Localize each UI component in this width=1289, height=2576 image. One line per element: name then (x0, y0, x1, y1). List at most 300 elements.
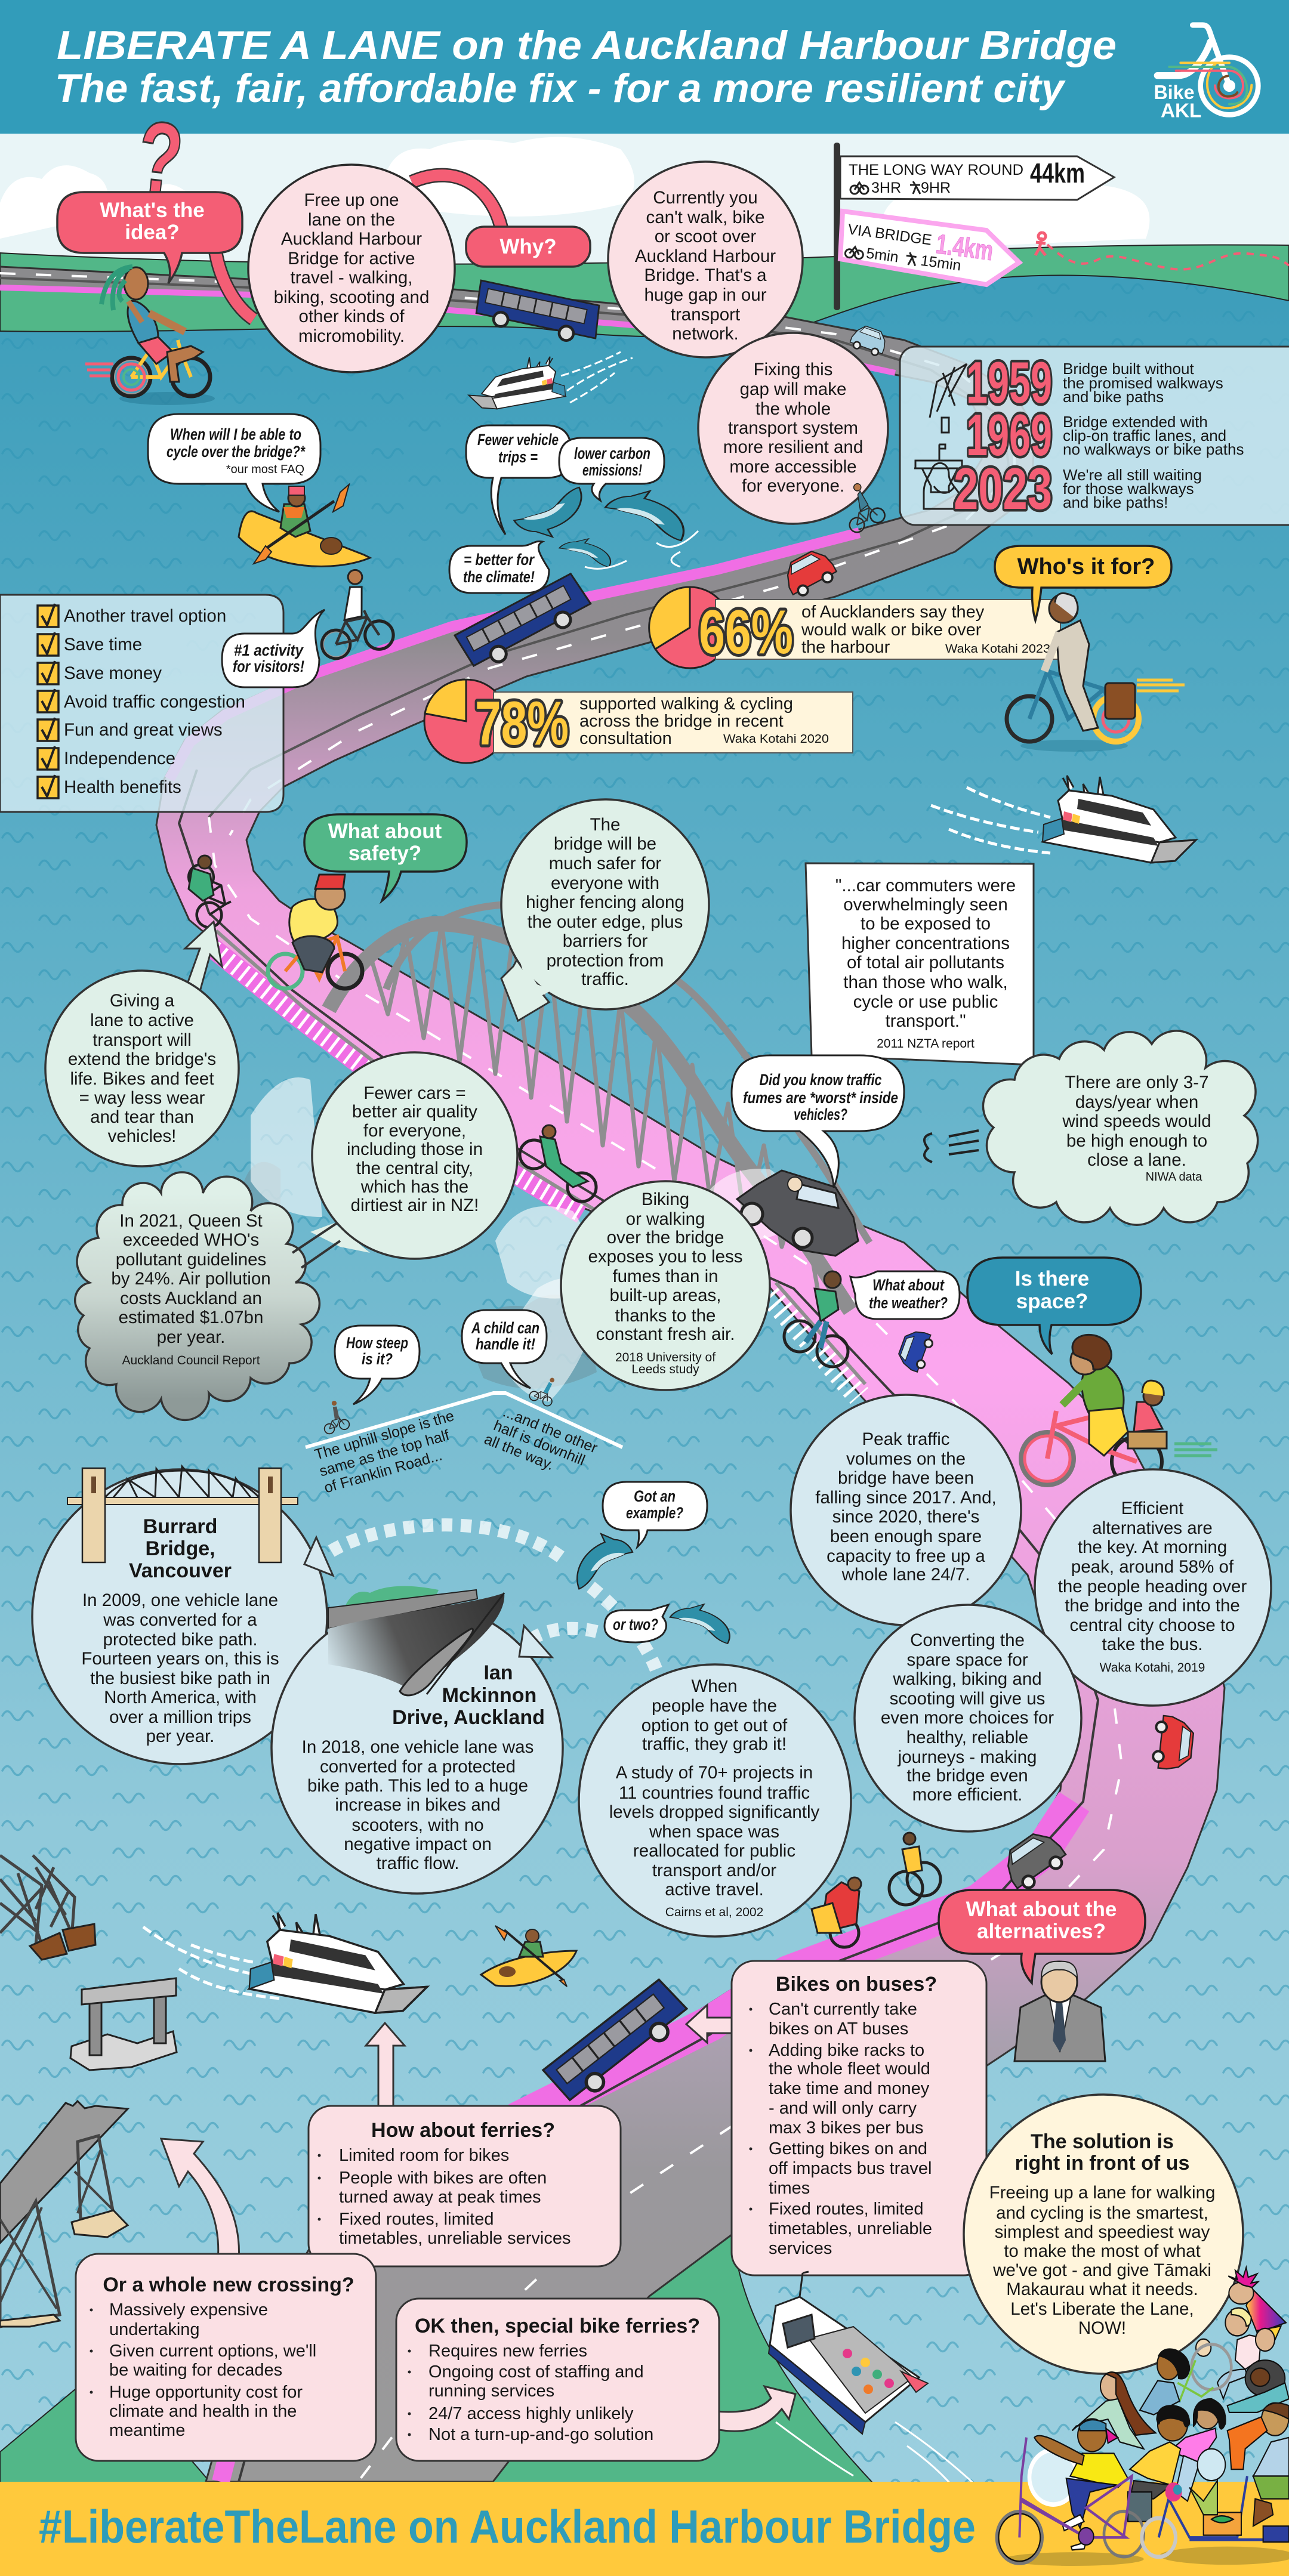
sign: via bridge: 5min (865, 245, 899, 266)
bubble: fewer cars: which has the (360, 1177, 468, 1197)
panel: history: no walkways or bike paths (1063, 440, 1244, 458)
bubble: did you know traffic fumes: Did you know traffic (759, 1071, 882, 1089)
bubble: got an example: Got an (634, 1487, 676, 1505)
bubble: when people have the option: active travel. (665, 1880, 764, 1899)
bubble: when will I be able to cycle: *our most FAQ (226, 463, 304, 476)
bubble: fixing this gap: more accessible (729, 457, 857, 477)
panel: checklist of benefits (0, 595, 283, 812)
stat: 78 percent: Waka Kotahi 2020 (723, 733, 829, 746)
bubble: when people have the option: when space was (649, 1822, 779, 1842)
panel: special bike ferries: 24/7 access highly unlikely (428, 2404, 634, 2423)
bubble: Burrard Bridge: Bridge, (145, 1537, 215, 1560)
bubble: is there space (967, 1258, 1141, 1354)
cloud: Queen St pollution: estimated $1.07bn (119, 1308, 263, 1327)
ferry: top (469, 352, 633, 409)
lane lines (0, 273, 1122, 2482)
bubble: free up one lane: other kinds of (298, 307, 405, 326)
bubble: the solution: The solution is (1031, 2130, 1174, 2153)
bubble: efficient alternatives: central city choose to (1069, 1616, 1235, 1635)
bubble: when people have the option: A study of 70+ projects in (616, 1763, 813, 1783)
bubble: biking or walking: over the bridge (607, 1228, 724, 1247)
bubble: giving a lane: = way less wear (79, 1088, 205, 1108)
wind lines (924, 1131, 979, 1162)
arrow: ferries (366, 2023, 405, 2112)
header (0, 0, 1289, 134)
bubble: when will I be able to cycle (148, 414, 320, 512)
cyclist: man in red hat (268, 875, 362, 989)
bubble: efficient alternatives: take the bus. (1102, 1635, 1202, 1654)
panel: history: and bike paths (1063, 388, 1164, 406)
bubble: Burrard Bridge: over a million trips (109, 1707, 251, 1727)
cloud: only 3-7 days: close a lane. (1087, 1150, 1186, 1170)
bubble: did you know traffic fumes: vehicles? (794, 1105, 847, 1123)
bubble: Ian Mckinnon Drive: scooters, with no (351, 1815, 484, 1835)
bottom banner: #LiberateTheLane on Auckland Harbour Bridge (39, 2500, 976, 2553)
panel: checklist of benefits: Save time (64, 635, 142, 654)
cloud: Queen St pollution (75, 1172, 319, 1420)
bubble: currently you can't: Auckland Harbour (635, 246, 776, 266)
bubble: is there space: space? (1016, 1290, 1088, 1313)
panel: checklist of benefits: Another travel option (64, 606, 226, 626)
cloud: only 3-7 days: days/year when (1075, 1092, 1198, 1112)
walking trail (1035, 233, 1289, 270)
bubble: giving a lane: transport will (92, 1030, 192, 1050)
bubble: what about safety: safety? (349, 842, 421, 865)
bubble: Burrard Bridge: North America, with (104, 1688, 257, 1707)
panel: whole new crossing: meantime (109, 2421, 185, 2440)
question mark: ? (132, 100, 188, 218)
hill slope diagram: ...and the other (501, 1404, 600, 1457)
bubble: what's the idea: What's the (100, 199, 205, 222)
bubble: the bridge will be much safer: everyone with (551, 873, 659, 893)
bubble: converting the spare space: healthy, reliable (906, 1728, 1028, 1747)
bubble: Ian Mckinnon Drive: In 2018, one vehicle lane was (302, 1737, 534, 1757)
title: LIBERATE A LANE on the Auckland Harbour Bridge (57, 23, 1117, 68)
magenta cycle strip (0, 288, 1074, 2482)
bubble: biking or walking (561, 1181, 770, 1390)
bubble: Burrard Bridge: the busiest bike path in (90, 1669, 270, 1688)
bubble: efficient alternatives: alternatives are (1092, 1518, 1213, 1538)
car: red top (779, 545, 839, 600)
bus: middle (455, 572, 595, 675)
bubble: fixing this gap: more resilient and (723, 437, 863, 457)
bubble: when people have the option: Cairns et al, 2002 (665, 1905, 763, 1919)
bubble: biking or walking: exposes you to less (588, 1247, 743, 1267)
black car with fumes (737, 1170, 858, 1256)
quote box: higher concentrations (841, 934, 1010, 953)
panel: history: Bridge built without (1063, 360, 1194, 378)
bubble: who's it for (995, 546, 1171, 620)
bubble: how steep: is it? (362, 1350, 393, 1368)
panel: whole new crossing: undertaking (109, 2320, 200, 2339)
bubble: what about the weather: What about (872, 1276, 945, 1294)
cyclist: near fixing bubble (834, 478, 887, 535)
bubble: Burrard Bridge (32, 1466, 333, 1764)
bubble: converting the spare space: more efficient. (912, 1785, 1022, 1805)
panel: history: for those walkways (1063, 480, 1194, 498)
bubble: lower carbon emissions: lower carbon (574, 444, 650, 462)
arrow to Ian Mckinnon (519, 1626, 552, 1657)
bubble: peak traffic: since 2020, there's (832, 1507, 979, 1527)
panel: special bike ferries: Requires new ferries (428, 2342, 587, 2361)
bubble: fewer cars: better air quality (352, 1102, 477, 1122)
bridge fence (206, 931, 865, 1396)
bubble: Ian Mckinnon Drive: bike path. This led to a huge (307, 1776, 528, 1796)
sign: long way round: THE LONG WAY ROUND (849, 162, 1023, 178)
bubble: the bridge will be much safer: higher fencing along (526, 892, 684, 912)
wheelchair user on bridge (520, 1125, 596, 1201)
quote box: transport." (885, 1011, 966, 1031)
sign: long way round: 9HR (921, 180, 951, 196)
icon: Burrard bridge (67, 1466, 298, 1562)
bubble: a child can handle it: A child can (471, 1319, 539, 1337)
head of green jacket cyclist (198, 855, 211, 869)
bubble: what's the idea: idea? (125, 221, 180, 244)
bus: lower (543, 1977, 693, 2109)
bubble: efficient alternatives: the key. At morning (1078, 1537, 1227, 1557)
bubble: the solution: to make the most of what (1004, 2241, 1201, 2261)
bubble: #1 activity: #1 activity (234, 641, 304, 659)
cyclist: older man with pannier (1007, 593, 1185, 752)
panel: history: and bike paths! (1063, 493, 1168, 511)
bubble: peak traffic: falling since 2017. And, (815, 1488, 997, 1508)
bubble: when people have the option: When (691, 1676, 738, 1696)
stat: 66 percent: of Aucklanders say they (801, 603, 985, 622)
land: top shore (0, 245, 1289, 336)
bubble: fixing this gap: Fixing this (754, 360, 832, 379)
bubble: free up one lane: biking, scooting and (274, 288, 429, 307)
panel: history: 2023 (954, 456, 1052, 521)
panel: whole new crossing: Or a whole new crossing? (103, 2274, 354, 2296)
panel: special bike ferries: OK then, special bike ferries? (415, 2315, 700, 2337)
stat: 66 percent: the harbour (801, 638, 890, 657)
bubble: how steep (335, 1326, 420, 1404)
panel: how about ferries: Fixed routes, limited (339, 2210, 494, 2229)
cloud: Queen St pollution: exceeded WHO's (123, 1230, 259, 1250)
bubble: currently you can't: network. (672, 324, 739, 344)
cloud: only 3-7 days: There are only 3-7 (1065, 1073, 1209, 1092)
bubble: biking or walking: built-up areas, (610, 1286, 721, 1305)
bubble: peak traffic: been enough spare (830, 1527, 982, 1546)
quote box: of total air pollutants (847, 953, 1004, 972)
bridge pier lower left (0, 2101, 128, 2327)
stat: 78 percent: 78% (475, 689, 569, 758)
bubble: biking or walking: fumes than in (612, 1267, 718, 1286)
bubble: giving a lane: and tear than (90, 1107, 194, 1127)
bubble: when people have the option: reallocated for public (633, 1841, 795, 1861)
bubble: peak traffic (791, 1395, 1021, 1625)
cloud: Queen St pollution: In 2021, Queen St (119, 1211, 263, 1231)
bubble: peak traffic: whole lane 24/7. (841, 1565, 970, 1584)
route dashes and arrows (331, 1525, 659, 1679)
panel: whole new crossing (76, 2254, 376, 2461)
panel: history: We're all still waiting (1063, 466, 1202, 484)
bubble: who's it for: Who's it for? (1017, 554, 1155, 579)
cloud: Queen St pollution: costs Auckland an (120, 1289, 262, 1308)
panel: bikes on buses: max 3 bikes per bus (769, 2118, 924, 2138)
panel: whole new crossing: Massively expensive (109, 2300, 268, 2319)
bubble: #1 activity (222, 610, 325, 687)
sign: via bridge (840, 211, 1019, 285)
bubble: the solution: simplest and speediest way (995, 2222, 1210, 2242)
cloud: only 3-7 days (983, 1031, 1258, 1225)
panel: whole new crossing: Huge opportunity cost for (109, 2383, 303, 2402)
logo: Bike AKL: AKL (1161, 100, 1201, 122)
van: red (1152, 1715, 1195, 1771)
stat: 78 percent: across the bridge in recent (579, 712, 784, 731)
bubble: giving a lane: Giving a (110, 991, 175, 1011)
cloud: Queen St pollution: Auckland Council Report (122, 1354, 260, 1367)
panel: bikes on buses: timetables, unreliable (769, 2219, 932, 2238)
hill slope diagram: The uphill slope is the (313, 1407, 456, 1463)
car: blue on bridge (895, 1327, 935, 1374)
bubble: giving a lane (45, 922, 239, 1166)
bubble: fewer cars: for everyone, (363, 1121, 466, 1141)
bubble: Ian Mckinnon Drive (272, 1586, 563, 1894)
panel: special bike ferries: Not a turn-up-and-go solution (428, 2425, 653, 2444)
panel: history: the promised walkways (1063, 374, 1223, 392)
bubble: efficient alternatives: Waka Kotahi, 2019 (1100, 1661, 1205, 1675)
bubble: what about safety: What about (328, 820, 442, 843)
bubble: Burrard Bridge: In 2009, one vehicle lane (82, 1590, 278, 1610)
bubble: converting the spare space: Converting the (910, 1630, 1025, 1650)
bubble: or two: or two? (613, 1616, 658, 1633)
bubble: when people have the option: option to get out of (642, 1716, 788, 1735)
bubble: the bridge will be much safer: much safer for (549, 854, 661, 873)
panel: whole new crossing: be waiting for decades (109, 2361, 282, 2380)
panel: bikes on buses: bikes on AT buses (769, 2019, 908, 2038)
stat: 66 percent: 66% (699, 598, 793, 667)
cloud: Queen St pollution: by 24%. Air pollution (111, 1269, 271, 1289)
sign: long way round: 3HR (871, 180, 901, 196)
quote box: "...car commuters were (835, 876, 1016, 895)
bubble: the solution: Let's Liberate the Lane, (1010, 2299, 1194, 2319)
stat: 66 percent: would walk or bike over (801, 620, 982, 640)
ferry: lower (143, 1913, 427, 2013)
bike ferry (769, 2272, 991, 2506)
sign: via bridge: VIA BRIDGE (847, 221, 933, 249)
stat: 66 percent: Waka Kotahi 2023 (945, 643, 1050, 656)
bubble: Burrard Bridge: Fourteen years on, this is (81, 1649, 279, 1669)
panel: special bike ferries: Ongoing cost of staffing and (428, 2362, 644, 2382)
bubble: a child can handle it (462, 1310, 547, 1388)
bubble: Ian Mckinnon Drive: Mckinnon (442, 1684, 536, 1707)
bubble: peak traffic: bridge have been (838, 1468, 974, 1488)
hill slope diagram: of Franklin Road... (322, 1447, 444, 1497)
trike with passengers (812, 1877, 861, 1947)
panel: history: Bridge extended with (1063, 413, 1208, 431)
panel: history (900, 347, 1289, 525)
bubble: the solution (964, 2095, 1243, 2374)
stat: 66 percent (649, 587, 1060, 668)
bubble: free up one lane: lane on the (308, 210, 395, 230)
panel: bikes on buses: Getting bikes on and (769, 2139, 927, 2158)
bubble: #1 activity: for visitors! (233, 657, 304, 675)
bubble: did you know traffic fumes: fumes are *worst* inside (743, 1089, 898, 1107)
bubble: did you know traffic fumes (732, 1055, 904, 1188)
bubble: a child can handle it: handle it! (476, 1335, 535, 1353)
panel: checklist of benefits: Independence (64, 749, 175, 768)
bubble: better for the climate: = better for (464, 551, 535, 569)
bubble: currently you can't: Currently you (653, 188, 758, 208)
bottom banner (0, 2482, 1289, 2576)
logo: Bike AKL (1154, 25, 1258, 122)
bubble: lower carbon emissions: emissions! (582, 461, 642, 479)
cyclist: girl (85, 267, 215, 405)
sign: long way round (840, 156, 1114, 200)
bubble: peak traffic: Peak traffic (862, 1429, 950, 1449)
panel: history: 1969 (966, 402, 1052, 468)
tails: red connectors (215, 175, 502, 319)
bubble: when people have the option: 11 countries found traffic (619, 1783, 810, 1803)
panel: special bike ferries: running services (428, 2382, 554, 2401)
bubble: the solution: we've got - and give Tāmaki (992, 2260, 1211, 2280)
cloud: Queen St pollution: pollutant guidelines (116, 1250, 266, 1270)
bubble: peak traffic: volumes on the (846, 1449, 966, 1469)
panel: bikes on buses (732, 1961, 986, 2275)
bubble: efficient alternatives: Efficient (1121, 1499, 1183, 1518)
bubble: converting the spare space: journeys - making (898, 1747, 1037, 1767)
sign: long way round: 44km (1030, 157, 1085, 189)
bubble: what about the alternatives: What about the (966, 1898, 1117, 1921)
arrow: buses (686, 2005, 737, 2043)
bubble: when will I be able to cycle: When will I be able to (170, 425, 301, 443)
bubble: what about the alternatives: alternatives? (977, 1920, 1106, 1943)
bubble: fixing this gap: the whole (755, 399, 831, 419)
bubble: biking or walking: 2018 University of (615, 1351, 716, 1364)
bubble: giving a lane: vehicles! (108, 1126, 176, 1146)
bubble: how steep: How steep (346, 1334, 408, 1352)
bubble: when people have the option: levels dropped significantly (609, 1802, 820, 1822)
bubble: the bridge will be much safer: the outer edge, plus (528, 912, 683, 932)
hill slope diagram: all the way. (482, 1431, 556, 1474)
cloud: only 3-7 days: NIWA data (1146, 1170, 1202, 1184)
bubble: fixing this gap: gap will make (740, 379, 846, 399)
bubble: or two (605, 1605, 668, 1642)
bubble: fewer vehicle trips (466, 425, 571, 535)
bubble: the solution: right in front of us (1015, 2152, 1189, 2175)
cloud: only 3-7 days: wind speeds would (1062, 1111, 1211, 1131)
bubble: Ian Mckinnon Drive: negative impact on (344, 1834, 492, 1854)
signpost (834, 143, 1114, 310)
bubble: what's the idea (57, 192, 242, 283)
bubble: Ian Mckinnon Drive: increase in bikes and (335, 1795, 501, 1815)
mini cyclists (317, 1398, 350, 1435)
man in suit (1014, 1962, 1105, 2061)
bubble: why (466, 227, 590, 267)
bubble: Burrard Bridge: Burrard (143, 1515, 217, 1538)
quote box: to be exposed to (861, 914, 991, 934)
panel: special bike ferries (396, 2299, 719, 2461)
panel: bikes on buses: Bikes on buses? (776, 1973, 937, 1996)
bubble: the solution: Makaurau what it needs. (1006, 2280, 1198, 2299)
cloud: only 3-7 days: be high enough to (1066, 1131, 1207, 1151)
land: lower shores (0, 2231, 877, 2488)
arrow: new crossing (161, 2139, 239, 2261)
bubble: converting the spare space (855, 1605, 1081, 1831)
bridge arch and hangers (329, 905, 869, 1311)
bubble: when people have the option: people have the (652, 1696, 777, 1716)
logo: Bike AKL: Bike (1154, 82, 1195, 104)
bubble: when will I be able to cycle: cycle over the bridge?* (166, 443, 306, 461)
bubble: efficient alternatives: the bridge and into the (1065, 1596, 1240, 1616)
bubble: got an example: example? (626, 1504, 683, 1522)
panel: bikes on buses: Fixed routes, limited (769, 2200, 924, 2219)
subtitle: The fast, fair, affordable fix - for a more resilient city (55, 66, 1066, 111)
crowd of cyclists (997, 2268, 1289, 2566)
bubble: currently you can't: can't walk, bike (646, 208, 765, 227)
concrete ties (70, 1978, 177, 2070)
panel: how about ferries: People with bikes are often (339, 2169, 547, 2188)
pollution lines (292, 1223, 340, 1268)
car: top blue (849, 323, 889, 357)
bubble: better for the climate: the climate! (463, 568, 535, 586)
bubble: lower carbon emissions (559, 438, 664, 501)
bubble: is there space: Is there (1015, 1267, 1089, 1290)
bubble: converting the spare space: the bridge even (906, 1766, 1028, 1786)
bubble: fewer vehicle trips: trips = (498, 448, 538, 466)
bubble: the solution: and cycling is the smartest, (996, 2203, 1208, 2223)
quote box: cycle or use public (853, 992, 998, 1012)
cyclist: lower (889, 1833, 940, 1905)
bubble: the bridge will be much safer: bridge will be (554, 834, 656, 854)
bubble: efficient alternatives (1035, 1469, 1271, 1706)
bubble: free up one lane (248, 165, 455, 372)
bubble: free up one lane: Auckland Harbour (281, 229, 422, 249)
bubble: giving a lane: life. Bikes and feet (70, 1069, 214, 1089)
bubble: peak traffic: capacity to free up a (827, 1546, 985, 1566)
panel: whole new crossing: Given current options, we'll (109, 2342, 316, 2361)
bubble: Burrard Bridge: Vancouver (129, 1559, 232, 1582)
quote box: 2011 NZTA report (877, 1037, 975, 1051)
arrow: special ferries (716, 2386, 795, 2431)
panel: how about ferries: timetables, unreliable services (339, 2229, 571, 2248)
bus: top road (473, 280, 602, 347)
bubble: Ian Mckinnon Drive: traffic flow. (377, 1854, 459, 1873)
checklist items (38, 606, 58, 798)
bubble: the bridge will be much safer: protection from (547, 951, 664, 971)
hill slope diagram: same as the top half (317, 1427, 451, 1480)
bubble: why: Why? (499, 235, 557, 258)
cyclist: woman and child (1021, 1335, 1217, 1487)
quote box: overwhelmingly seen (843, 895, 1008, 915)
bubble: fixing this gap: transport system (728, 418, 858, 438)
panel: checklist of benefits: Fun and great views (64, 720, 223, 740)
arrow to Burrard (304, 1537, 333, 1576)
bubble: free up one lane: Bridge for active (288, 249, 415, 268)
bubble: currently you can't: transport (671, 305, 740, 325)
panel: bikes on buses: services (769, 2239, 832, 2258)
car: grey (997, 1826, 1070, 1894)
bubble: when people have the option: traffic, they grab it! (642, 1734, 787, 1754)
panel: history: 1959 (966, 350, 1052, 415)
bubble: free up one lane: micromobility. (298, 326, 405, 346)
bubble: currently you can't (608, 162, 803, 357)
quote box: than those who walk, (843, 972, 1008, 992)
panel: history: clip-on traffic lanes, and (1063, 427, 1226, 444)
bubble: fewer cars: dirtiest air in NZ! (351, 1196, 479, 1215)
bubble: what about the weather (850, 1271, 960, 1319)
kayaker: lower (481, 1926, 576, 1987)
bubble: what about the alternatives (939, 1890, 1145, 1983)
panel: how about ferries: turned away at peak times (339, 2188, 541, 2207)
dolphin: or two (670, 1604, 730, 1644)
bubble: giving a lane: lane to active (90, 1011, 194, 1030)
panel: checklist of benefits: Health benefits (64, 777, 181, 797)
bubble: free up one lane: travel - walking, (291, 268, 412, 288)
bubble: efficient alternatives: the people heading over (1058, 1577, 1247, 1596)
stat: 78 percent: supported walking & cycling (579, 694, 793, 714)
